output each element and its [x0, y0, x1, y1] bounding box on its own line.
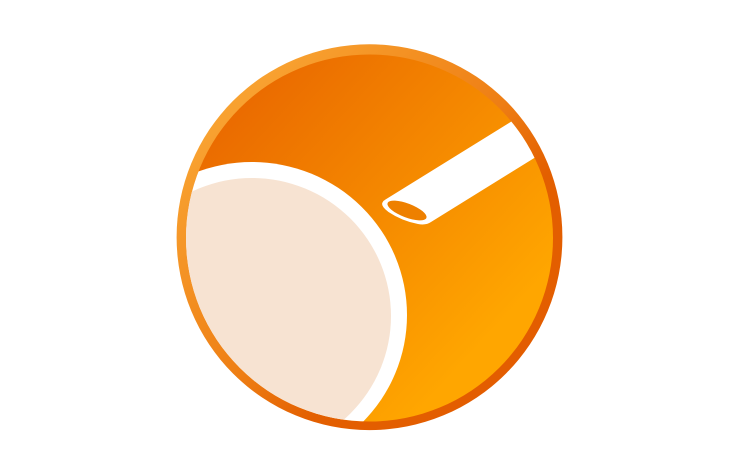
icon: round badge	[176, 44, 562, 430]
peach circle	[186, 178, 391, 420]
tube opening	[387, 200, 426, 220]
tube body	[382, 122, 534, 224]
tube	[382, 122, 534, 224]
large circle with white border	[186, 162, 407, 422]
badge outer ring	[177, 44, 562, 430]
badge orange fill	[186, 54, 553, 422]
white circle border	[186, 162, 407, 422]
